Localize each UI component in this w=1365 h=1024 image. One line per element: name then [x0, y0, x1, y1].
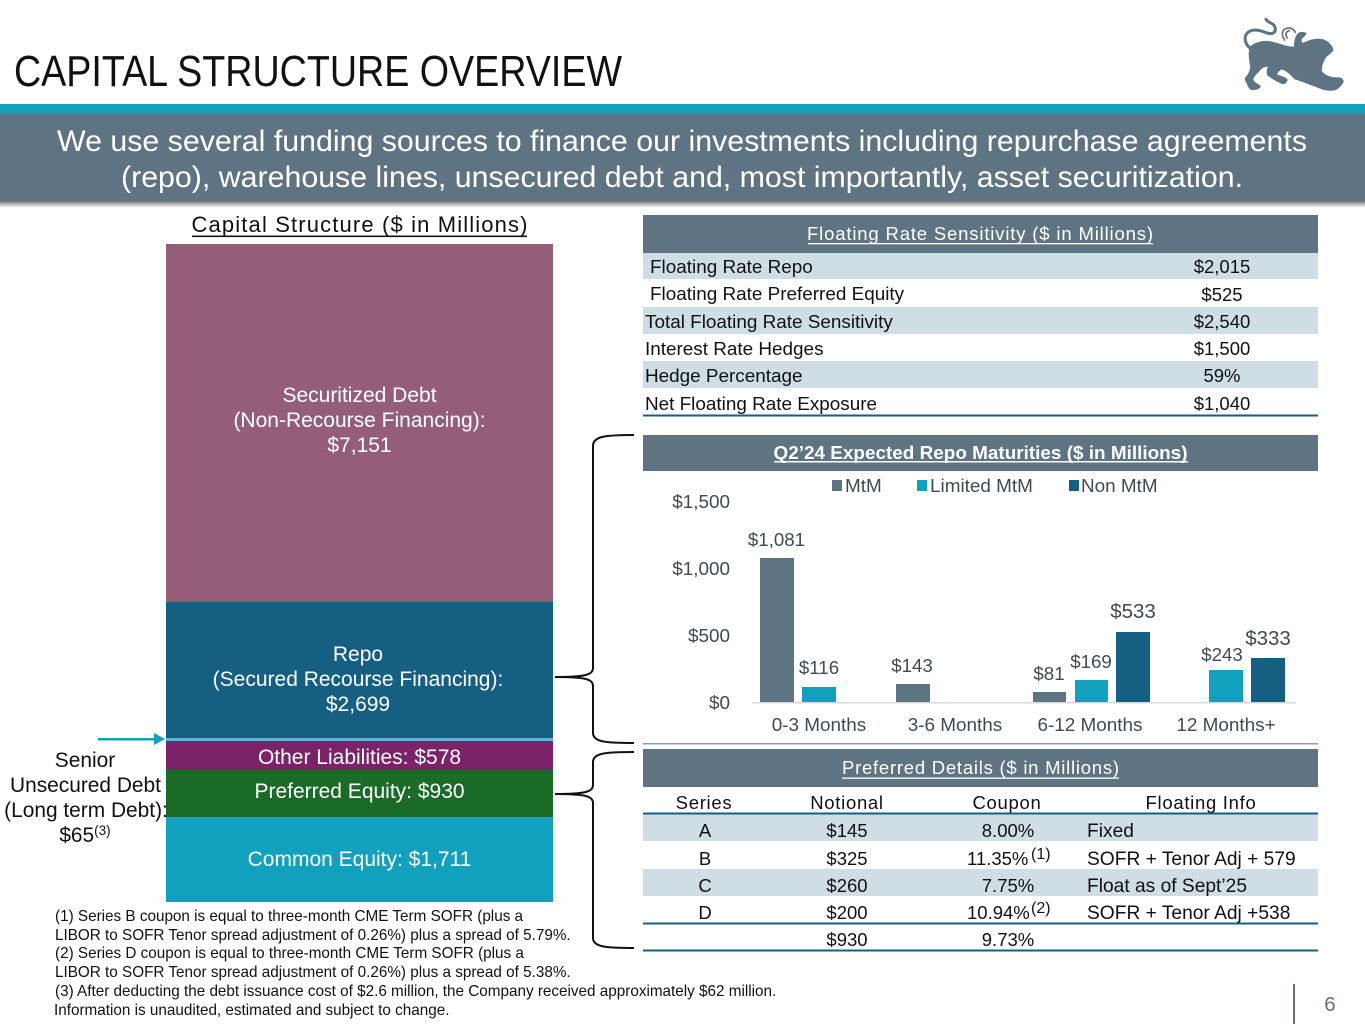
footnotes [54, 908, 776, 1019]
column headings: Coupon [972, 792, 1042, 813]
x axis labels: 6-12 Months [1037, 715, 1143, 736]
column headings: Floating Info [1146, 792, 1256, 813]
data labels: $81 [1033, 663, 1065, 684]
column headings [676, 792, 1256, 813]
table header [643, 215, 1318, 253]
segment: securitized debt: Securitized Debt [282, 384, 437, 407]
label: senior unsecured debt: (3) [94, 823, 111, 838]
panel: preferred details table: D [698, 902, 712, 923]
panel: floating rate sensitivity table: $2,540 [1194, 311, 1250, 332]
panel: preferred details table: $930 [826, 929, 868, 950]
x axis labels: 12 Months+ [1176, 715, 1276, 736]
y axis labels: $0 [709, 693, 730, 714]
table header: Preferred Details ($ in Millions) [842, 757, 1119, 778]
panel: preferred details table: (1) [1031, 846, 1051, 863]
segment: repo: (Secured Recourse Financing): [213, 668, 503, 691]
column headings: Series [676, 792, 732, 813]
segment: securitized debt: $7,151 [327, 434, 392, 457]
panel: capital structure stacked column [166, 244, 553, 902]
y axis labels: $500 [688, 626, 730, 647]
data labels [748, 529, 1291, 684]
page number: 6 [1324, 993, 1336, 1016]
panel: floating rate sensitivity table: Hedge Percentage [645, 366, 803, 387]
panel: floating rate sensitivity table: 59% [1203, 365, 1241, 386]
x axis labels: 0-3 Months [772, 715, 866, 736]
segment: securitized debt: (Non-Recourse Financing): [233, 409, 486, 432]
panel: preferred details table: SOFR + Tenor Adj +538 [1087, 903, 1290, 924]
footnotes: (3) After deducting the debt issuance cost of $2.6 million, the Company received approximately $62 million. [55, 983, 776, 1000]
footnotes: (1) Series B coupon is equal to three-month CME Term SOFR (plus a [55, 908, 524, 925]
y axis labels: $1,500 [672, 492, 730, 513]
segment: repo: Repo [333, 643, 383, 666]
panel: floating rate sensitivity table: $1,500 [1194, 338, 1250, 359]
panel: floating rate sensitivity table: Floating Rate Preferred Equity [650, 284, 905, 305]
chart header [643, 435, 1318, 471]
bars [760, 558, 1285, 702]
panel: preferred details table: $260 [826, 875, 868, 896]
segment: senior unsecured debt sliver [166, 738, 553, 741]
data labels: $333 [1245, 627, 1291, 650]
chart header: Q2’24 Expected Repo Maturities ($ in Millions) [774, 442, 1188, 463]
y axis labels: $1,000 [672, 559, 730, 580]
panel: preferred details table: Float as of Sept’25 [1087, 876, 1247, 897]
segment: securitized debt [166, 244, 553, 602]
panel: floating rate sensitivity table: $525 [1201, 284, 1243, 305]
panel: preferred details table: 11.35% [967, 848, 1028, 869]
segment: repo [166, 602, 553, 738]
panel: floating rate sensitivity table: $2,015 [1194, 256, 1250, 277]
chart legend [832, 476, 1158, 497]
y axis labels [672, 492, 730, 714]
data labels: $243 [1201, 644, 1243, 665]
bracket: repo [555, 435, 634, 743]
panel: floating rate sensitivity table: Floating Rate Repo [650, 257, 813, 278]
panel: repo maturities chart [643, 435, 1318, 744]
banner: key message [0, 114, 1365, 208]
x axis labels: 3-6 Months [908, 715, 1002, 736]
panel: preferred details table: SOFR + Tenor Adj + 579 [1087, 849, 1296, 870]
chart legend: Limited MtM [930, 476, 1033, 497]
label: senior unsecured debt [4, 749, 168, 847]
label: senior unsecured debt: Unsecured Debt [10, 774, 161, 797]
page number [1293, 984, 1336, 1024]
footnotes: LIBOR to SOFR Tenor spread adjustment of 0.26%) plus a spread of 5.38%. [55, 964, 571, 981]
segment: other liabilities [166, 741, 553, 770]
segment: common equity: Common Equity: $1,711 [248, 848, 471, 871]
arrow: senior unsecured debt pointer [98, 733, 165, 745]
heading: capital structure: Capital Structure ($ in Millions) [192, 212, 528, 237]
banner: key message: (repo), warehouse lines, unsecured debt and, most importantly, asset securitization. [121, 161, 1243, 194]
panel: preferred details table: 10.94% [967, 902, 1030, 923]
panel: preferred details table: (2) [1031, 900, 1051, 917]
table header: Floating Rate Sensitivity ($ in Millions) [807, 223, 1153, 244]
label: senior unsecured debt: $65 [59, 824, 94, 847]
panel: preferred details table [643, 749, 1318, 952]
icon: company logo chimera [1245, 19, 1344, 91]
footnotes: Information is unaudited, estimated and subject to change. [54, 1002, 449, 1019]
data labels: $533 [1110, 600, 1156, 623]
panel: preferred details table: $325 [826, 848, 868, 869]
panel: floating rate sensitivity table: Total Floating Rate Sensitivity [645, 312, 893, 333]
label: senior unsecured debt: Senior [55, 749, 115, 772]
panel: preferred details table: C [698, 875, 712, 896]
panel: preferred details table: 9.73% [982, 929, 1034, 950]
table header [643, 749, 1318, 787]
teal header stripe [0, 104, 1365, 114]
panel: preferred details table: 8.00% [982, 820, 1034, 841]
panel: floating rate sensitivity table [643, 215, 1318, 416]
bracket: preferred equity [555, 752, 634, 948]
panel: floating rate sensitivity table: Net Floating Rate Exposure [645, 394, 877, 415]
x axis labels [772, 715, 1276, 736]
panel: floating rate sensitivity table: Interest Rate Hedges [645, 339, 824, 360]
banner: key message: We use several funding sources to finance our investments including repurchase agreements [57, 125, 1307, 158]
data labels: $1,081 [748, 529, 805, 550]
segment: other liabilities: Other Liabilities: $578 [258, 746, 461, 769]
data labels: $143 [891, 655, 933, 676]
data labels: $169 [1070, 651, 1112, 672]
panel: preferred details table: 7.75% [982, 875, 1034, 896]
chart legend: MtM [845, 476, 882, 497]
segment: preferred equity [166, 770, 553, 817]
footnotes: (2) Series D coupon is equal to three-month CME Term SOFR (plus a [55, 945, 524, 962]
segment: preferred equity: Preferred Equity: $930 [254, 780, 465, 803]
segment: repo: $2,699 [326, 693, 390, 716]
panel: floating rate sensitivity table: $1,040 [1194, 393, 1250, 414]
label: senior unsecured debt: (Long term Debt): [4, 799, 168, 822]
panel: preferred details table: $200 [826, 902, 868, 923]
footnotes: LIBOR to SOFR Tenor spread adjustment of 0.26%) plus a spread of 5.79%. [55, 927, 571, 944]
title: CAPITAL STRUCTURE OVERVIEW [14, 47, 622, 96]
panel: preferred details table: $145 [826, 820, 868, 841]
panel: preferred details table: A [699, 820, 712, 841]
panel: preferred details table: B [699, 848, 711, 869]
chart legend: Non MtM [1081, 476, 1158, 497]
panel: preferred details table: Fixed [1087, 821, 1134, 842]
column headings: Notional [810, 792, 884, 813]
data labels: $116 [799, 657, 839, 678]
segment: common equity [166, 817, 553, 902]
